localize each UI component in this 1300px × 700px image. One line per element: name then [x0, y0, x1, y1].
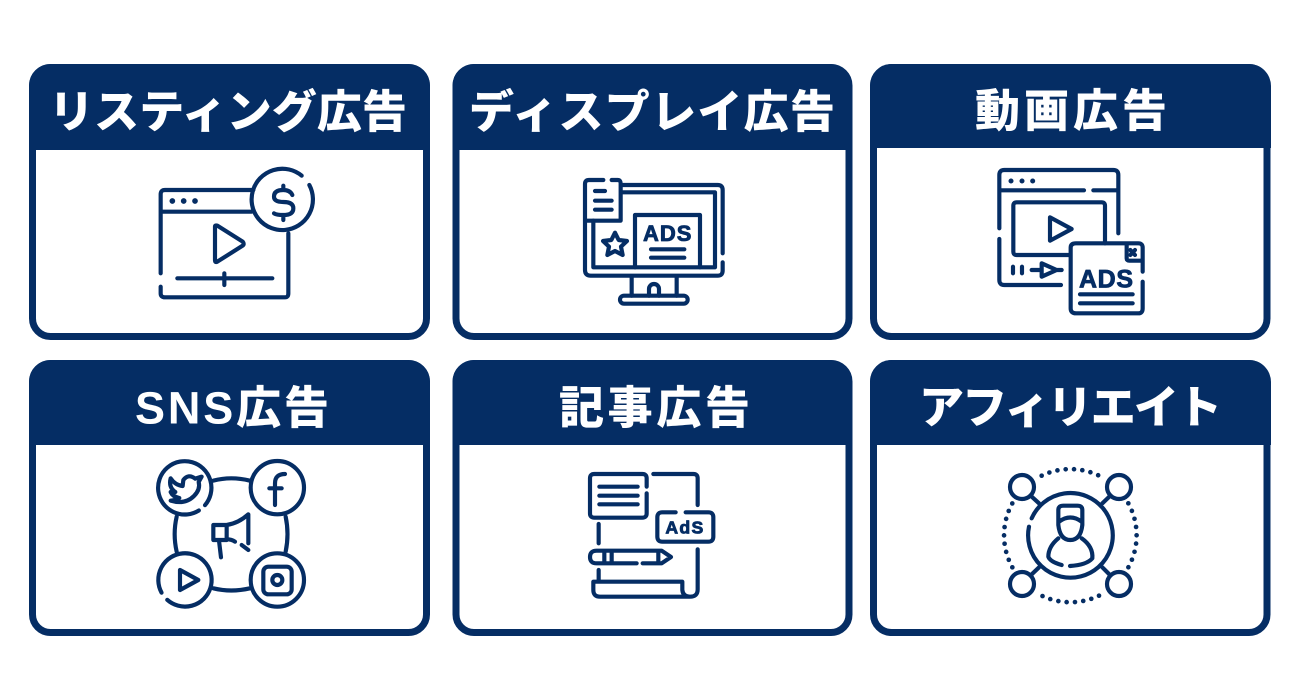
panel: SNS ads [29, 360, 430, 632]
header bar [452, 360, 852, 445]
header bar [870, 64, 1271, 148]
heading: ディスプレイ広告 [469, 86, 835, 138]
panel frame [874, 68, 1267, 336]
header bar [452, 64, 852, 150]
panel frame [32, 68, 426, 336]
heading: リスティング広告 [49, 86, 407, 138]
header bar [29, 360, 430, 445]
panel frame [874, 364, 1267, 632]
heading: 動画広告 [975, 86, 1167, 136]
icon: article document with pencil [590, 474, 713, 597]
panel frame [456, 68, 849, 336]
panel: video ads [870, 64, 1271, 336]
icon: person with connected nodes [1004, 469, 1137, 602]
panel: article ads [452, 360, 852, 632]
header bar [870, 360, 1271, 445]
icon: monitor with ads [585, 180, 723, 304]
panel: display ads [452, 64, 852, 336]
panel frame [32, 364, 426, 632]
heading: 記事広告 [559, 382, 750, 434]
heading: SNS広告 [135, 382, 329, 434]
icon: social media network [158, 461, 304, 607]
heading: アフィリエイト [919, 382, 1222, 433]
icon: video window with ad popup: ADS [1079, 265, 1134, 293]
icon: video window with dollar coin [161, 169, 313, 297]
panel: affiliate [870, 360, 1271, 632]
header bar [29, 64, 430, 150]
icon: article document with pencil: AdS [665, 517, 705, 537]
icon: monitor with ads: ADS [643, 221, 692, 246]
panel frame [456, 364, 849, 632]
icon: video window with ad popup [999, 170, 1143, 313]
panel: listing ads [29, 64, 430, 336]
